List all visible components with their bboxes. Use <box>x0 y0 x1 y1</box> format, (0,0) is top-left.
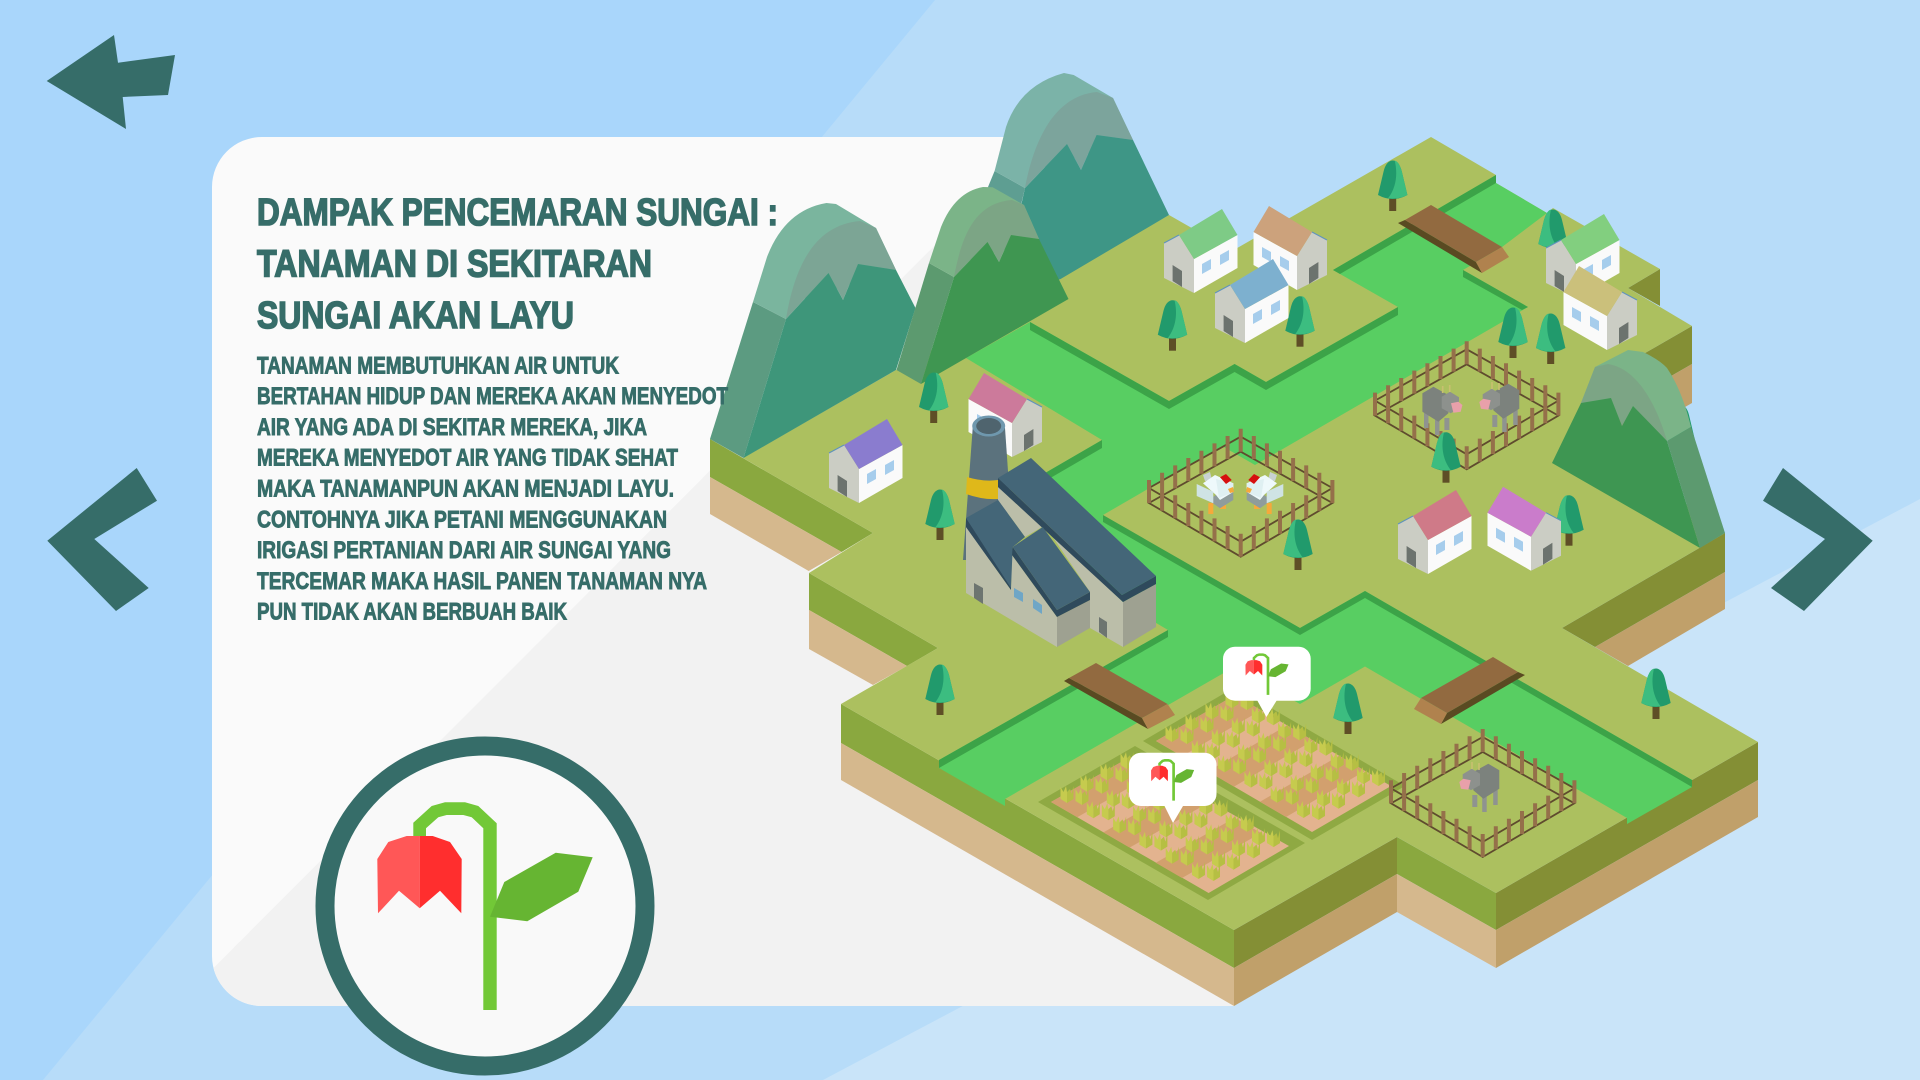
island ground surface <box>743 137 1758 930</box>
chicken: right <box>1246 472 1283 514</box>
river <box>939 175 1692 824</box>
mountain: left <box>710 203 916 458</box>
title: DAMPAK PENCEMARAN SUNGAI : <box>257 192 778 234</box>
farm field: upper <box>1143 687 1405 840</box>
body text: MEREKA MENYEDOT AIR YANG TIDAK SEHAT <box>257 445 678 472</box>
body text: AIR YANG ADA DI SEKITAR MEREKA, JIKA <box>257 414 647 441</box>
chimney <box>963 416 1010 560</box>
cow: left <box>1422 385 1462 435</box>
house: yellow <box>1564 266 1637 350</box>
body text: PUN TIDAK AKAN BERBUAH BAIK <box>257 599 568 626</box>
cow: right <box>1479 382 1519 432</box>
body text: IRIGASI PERTANIAN DARI AIR SUNGAI YANG <box>257 537 671 564</box>
roofs <box>966 458 1156 617</box>
arrow: previous <box>47 468 157 611</box>
body text: TERCEMAR MAKA HASIL PANEN TANAMAN NYA <box>257 568 707 595</box>
house: purple <box>829 419 902 503</box>
mountain: back <box>988 73 1169 300</box>
body text: BERTAHAN HIDUP DAN MEREKA AKAN MENYEDOT <box>257 383 728 410</box>
bridge: lower right <box>1414 657 1525 724</box>
house: green <box>1164 209 1238 293</box>
house: light green right <box>1546 214 1620 298</box>
mountain: right <box>1552 350 1725 548</box>
house: blue <box>1215 259 1288 343</box>
callout: wilted flower upper <box>1223 647 1311 717</box>
icon: wilted flower in circle <box>325 746 645 1066</box>
tree: by blue house <box>1285 296 1315 347</box>
tree: behind right mountain <box>1665 404 1695 455</box>
body text: CONTOHNYA JIKA PETANI MENGGUNAKAN <box>257 506 667 533</box>
body text: MAKA TANAMANPUN AKAN MENJADI LAYU. <box>257 476 674 502</box>
body text: TANAMAN MEMBUTUHKAN AIR UNTUK <box>257 352 620 379</box>
cow: lone <box>1459 762 1499 812</box>
fence: cows <box>1375 341 1558 469</box>
building walls <box>966 487 1156 647</box>
house: red <box>1398 490 1472 574</box>
arrow: next <box>1763 468 1873 611</box>
bridge: lower left <box>1064 663 1175 729</box>
house: pink <box>968 373 1042 457</box>
title <box>257 192 778 337</box>
mountain: middle <box>896 187 1068 384</box>
body text <box>257 352 728 626</box>
fence: chickens <box>1149 429 1332 557</box>
chicken: left <box>1197 472 1234 514</box>
trees: central and lower land <box>925 432 1671 734</box>
isometric island illustration <box>710 73 1758 1006</box>
farm field: lower <box>1038 746 1305 900</box>
factory <box>963 416 1156 647</box>
panel: white text card <box>212 137 1234 1006</box>
house: tan <box>1254 206 1327 290</box>
trees: upper land <box>919 160 1568 540</box>
house: violet <box>1488 487 1561 571</box>
title: TANAMAN DI SEKITARAN <box>257 244 652 286</box>
bridge: top <box>1398 205 1509 273</box>
arrow: back <box>47 35 175 129</box>
island side faces <box>710 269 1758 1006</box>
fence: lone cow <box>1391 729 1574 857</box>
callout: wilted flower lower <box>1129 753 1216 823</box>
trees: beside yellow house <box>1498 308 1565 364</box>
title: SUNGAI AKAN LAYU <box>257 295 574 337</box>
